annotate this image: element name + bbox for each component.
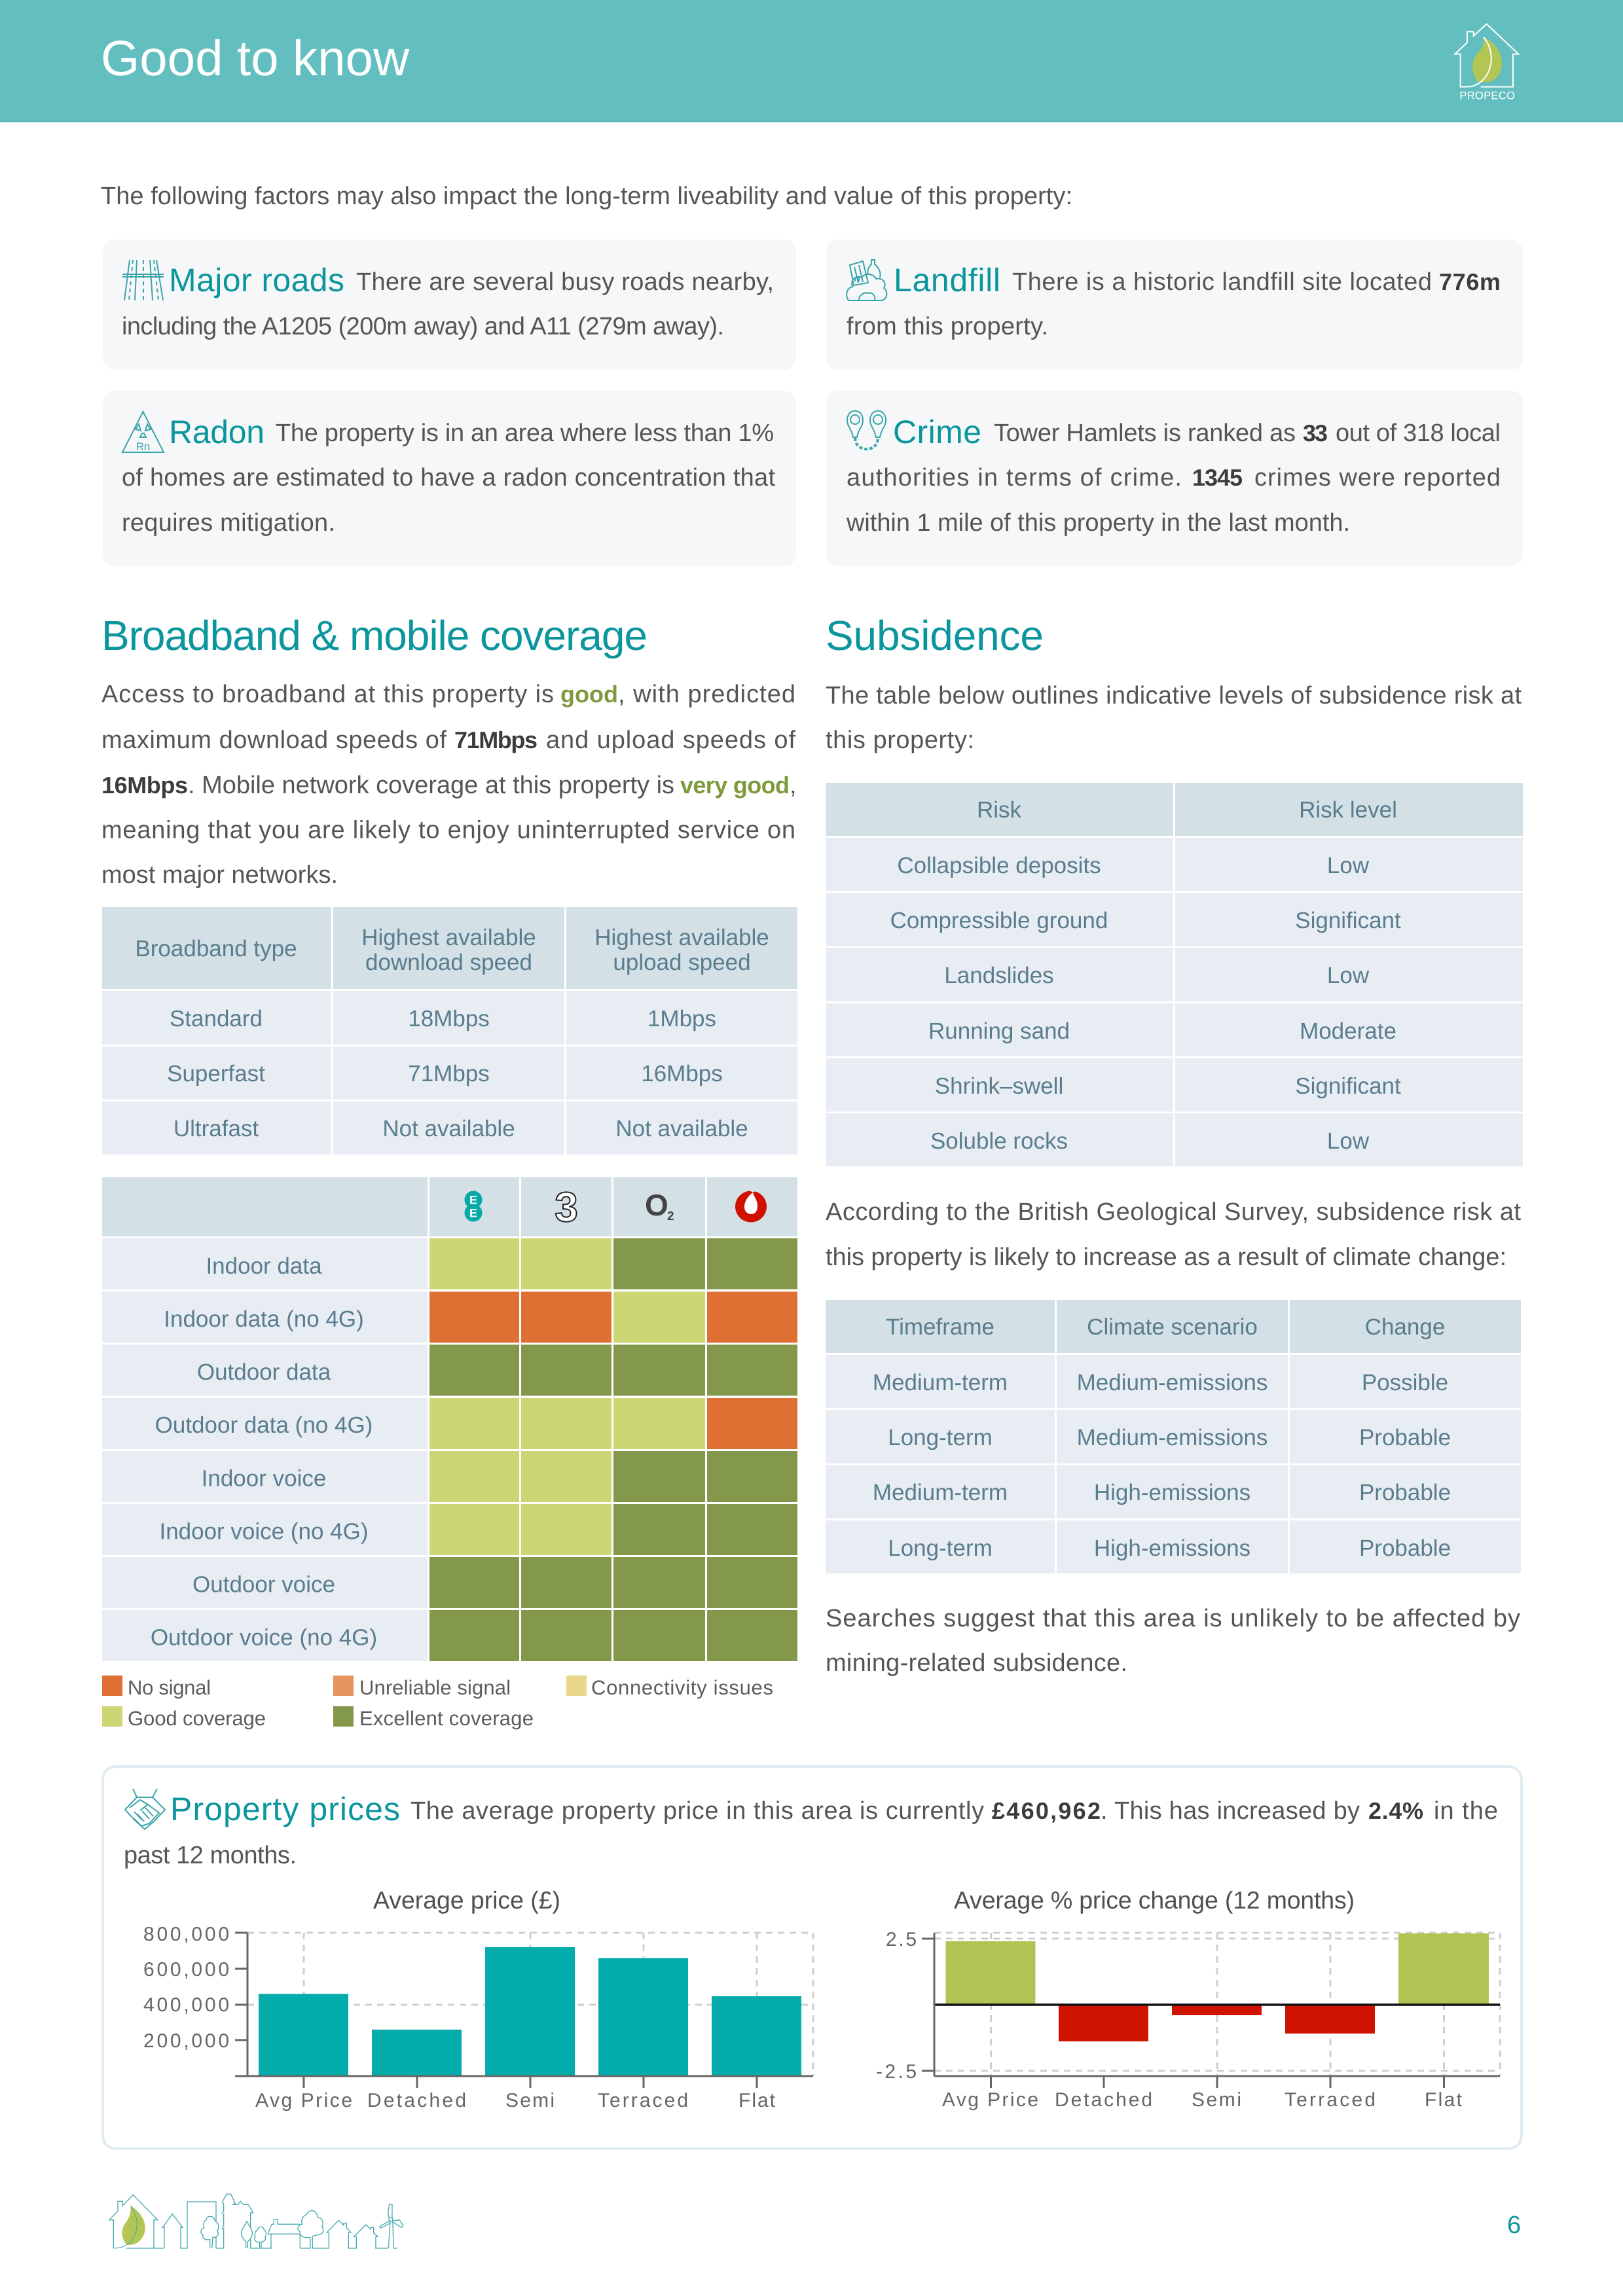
text: subsidence intro: [826, 682, 1522, 754]
text: radon: The property is in an area where less than 1%: [276, 420, 774, 447]
text: crime: 33: [1303, 420, 1328, 446]
table: broadband speeds: Highest available: [361, 925, 536, 950]
text: crime: [846, 420, 1501, 537]
legend: mobile coverage: Connectivity issues: [591, 1676, 773, 1699]
x axis labels: average price: Terraced: [598, 2090, 688, 2111]
y axis labels: price change: -2.5: [876, 2061, 917, 2083]
table: mobile coverage: Indoor voice: [202, 1466, 326, 1491]
table: climate scenarios: Climate scenario: [1087, 1314, 1258, 1340]
panel: crime: [826, 391, 1523, 566]
panel: major roads: [103, 240, 796, 370]
intro text: The following factors may also impact the long-term liveability and value of this property:: [101, 183, 1072, 210]
table: mobile coverage: Outdoor voice (no 4G): [151, 1624, 377, 1651]
table: climate scenarios: High-emissions: [1094, 1535, 1250, 1561]
heading: crime: Crime: [893, 414, 981, 450]
title: Good to know: [101, 31, 410, 86]
icon: Propeco logo: PROPECO: [1459, 89, 1515, 101]
table: subsidence risk: Significant: [1295, 908, 1401, 933]
x axis labels: price change: Detached: [1055, 2089, 1152, 2111]
text: broadband summary: Access to broadband at this property is: [101, 681, 554, 708]
text: major roads: There are several busy roads nearby,: [356, 268, 774, 296]
text: property prices summary: 2.4%: [1368, 1797, 1423, 1824]
table: subsidence risk: Low: [1327, 963, 1370, 988]
text: property prices summary: £460,962: [992, 1797, 1101, 1824]
table: broadband speeds: 1Mbps: [647, 1006, 716, 1031]
table: subsidence risk: Collapsible deposits: [897, 853, 1101, 878]
legend: mobile coverage: Excellent coverage: [359, 1707, 534, 1730]
text: broadband summary: 16Mbps: [101, 772, 188, 798]
text: radon: of homes are estimated to have a radon concentration that: [122, 464, 775, 492]
table: broadband speeds: Standard: [170, 1006, 263, 1031]
text: broadband summary: most major networks.: [101, 861, 338, 889]
text: radon: [122, 420, 775, 537]
icon: O2 logo: O: [645, 1188, 668, 1222]
icon: motorway: [122, 260, 164, 300]
table: subsidence risk: Shrink–swell: [935, 1073, 1063, 1099]
legend: mobile coverage: [102, 1676, 773, 1730]
text: broadband summary: ,: [790, 772, 797, 799]
footer skyline illustration: [109, 2194, 403, 2248]
table: broadband speeds: Ultrafast: [173, 1116, 259, 1141]
text: broadband summary: good: [560, 681, 618, 708]
text: mining subsidence: mining-related subsidence.: [826, 1649, 1127, 1677]
icon: EE logo: [465, 1191, 482, 1221]
panel: property prices: [103, 1767, 1522, 2149]
text: climate change intro: [826, 1198, 1521, 1271]
icon: radon: [122, 412, 164, 453]
table: mobile coverage: Indoor data (no 4G): [164, 1306, 364, 1332]
icon: handshake: [125, 1789, 165, 1829]
table: climate scenarios: High-emissions: [1094, 1480, 1250, 1505]
table: climate scenarios: Probable: [1359, 1535, 1451, 1561]
table: subsidence risk: Moderate: [1300, 1018, 1396, 1044]
text: broadband summary: , with predicted: [618, 681, 795, 708]
heading: radon: Radon: [169, 414, 264, 450]
table: climate scenarios: Medium-term: [873, 1480, 1008, 1505]
table: broadband speeds: 16Mbps: [641, 1061, 723, 1086]
chart title: average price: Average price (£): [373, 1886, 560, 1914]
text: property prices summary: . This has increased by: [1101, 1797, 1360, 1825]
table: mobile coverage: Outdoor data (no 4G): [155, 1412, 373, 1438]
table: climate scenarios: Long-term: [888, 1425, 993, 1450]
y axis labels: average price: 400,000: [143, 1994, 229, 2016]
table: climate scenarios: Probable: [1359, 1480, 1451, 1505]
table: subsidence risk: Landslides: [944, 963, 1054, 988]
text: climate change intro: According to the British Geological Survey, subsidence risk at: [826, 1198, 1521, 1226]
table: climate scenarios: Medium-emissions: [1077, 1370, 1267, 1395]
x axis labels: average price: [255, 2090, 776, 2111]
text: mining subsidence: Searches suggest that this area is unlikely to be affected by: [826, 1605, 1520, 1632]
y axis labels: average price: [143, 1924, 229, 2052]
table: broadband speeds: 71Mbps: [408, 1061, 490, 1086]
text: major roads: including the A1205 (200m away) and A11 (279m away).: [122, 313, 724, 340]
text: crime: within 1 mile of this property in the last month.: [846, 509, 1350, 537]
chart: average price: [143, 1886, 813, 2111]
table: broadband speeds: download speed: [365, 950, 532, 975]
heading: major roads: Major roads: [169, 262, 344, 298]
icon: landfill: [847, 260, 886, 300]
y axis labels: price change: 2.5: [886, 1929, 917, 1950]
text: broadband summary: and upload speeds of: [546, 726, 795, 754]
icon: Propeco logo: [1455, 24, 1518, 101]
panel: landfill: [826, 240, 1523, 370]
x axis labels: average price: Semi: [505, 2090, 555, 2111]
chart: average percent price change: [876, 1886, 1500, 2111]
text: property prices summary: [124, 1797, 1498, 1869]
heading: subsidence: Subsidence: [826, 612, 1044, 659]
table: subsidence risk: Risk level: [1299, 797, 1397, 823]
table: climate scenarios: [826, 1300, 1521, 1573]
table: climate scenarios: Probable: [1359, 1425, 1451, 1450]
table: climate scenarios: Possible: [1362, 1370, 1448, 1395]
icon: O2 logo: 2: [667, 1210, 674, 1223]
x axis labels: price change: Semi: [1192, 2089, 1241, 2111]
text: major roads: [122, 268, 774, 340]
bars: price change: [945, 1933, 1489, 2041]
table: climate scenarios: Medium-term: [873, 1370, 1008, 1395]
text: broadband summary: [101, 681, 797, 889]
text: crime: Tower Hamlets is ranked as: [994, 420, 1296, 447]
table: subsidence risk: Compressible ground: [890, 908, 1108, 933]
text: mining subsidence: [826, 1605, 1520, 1677]
icon: Three logo: 3: [555, 1183, 578, 1230]
table: climate scenarios: Medium-emissions: [1077, 1425, 1267, 1450]
table: mobile coverage: Indoor data: [206, 1253, 322, 1279]
text: radon: requires mitigation.: [122, 509, 335, 537]
text: crime: out of 318 local: [1336, 420, 1501, 447]
bars: average price: [259, 1947, 801, 2076]
table: subsidence risk: Significant: [1295, 1073, 1401, 1099]
table: mobile coverage: Outdoor data: [197, 1359, 331, 1385]
icon: handcuffs: [847, 411, 886, 449]
legend: mobile coverage: No signal: [128, 1676, 211, 1699]
text: climate change intro: this property is likely to increase as a result of climate change:: [826, 1244, 1506, 1271]
table: broadband speeds: upload speed: [613, 950, 751, 975]
x axis labels: price change: Terraced: [1285, 2089, 1376, 2111]
table: subsidence risk: Running sand: [928, 1018, 1070, 1044]
y axis labels: average price: 800,000: [143, 1924, 229, 1945]
text: broadband summary: maximum download speeds of: [101, 726, 447, 754]
table: broadband speeds: Highest available: [594, 925, 769, 950]
table: broadband speeds: Superfast: [167, 1061, 265, 1086]
table: mobile coverage: [102, 1177, 797, 1661]
header banner: [0, 0, 1623, 122]
legend: mobile coverage: Unreliable signal: [359, 1676, 511, 1699]
heading: broadband and mobile coverage: Broadband & mobile coverage: [101, 612, 647, 659]
text: broadband summary: . Mobile network coverage at this property is: [188, 772, 674, 799]
x axis labels: average price: Detached: [367, 2090, 466, 2111]
text: landfill: from this property.: [847, 313, 1048, 340]
table: subsidence risk: Risk: [977, 797, 1022, 823]
heading: property prices: Property prices: [170, 1791, 400, 1827]
table: broadband speeds: Not available: [615, 1116, 748, 1141]
table: mobile coverage: Outdoor voice: [192, 1572, 335, 1597]
text: property prices summary: The average property price in this area is currently: [410, 1797, 984, 1825]
x axis labels: price change: [942, 2089, 1463, 2111]
text: crime: 1345: [1192, 464, 1243, 491]
text: subsidence intro: this property:: [826, 726, 974, 754]
x axis labels: price change: Avg Price: [942, 2089, 1038, 2111]
table: broadband speeds: 18Mbps: [408, 1006, 490, 1031]
x axis labels: average price: Flat: [739, 2090, 776, 2111]
text: landfill: [847, 268, 1501, 340]
text: landfill: There is a historic landfill site located: [1012, 268, 1432, 296]
text: property prices summary: in the: [1434, 1797, 1498, 1825]
chart title: price change: Average % price change (12 months): [954, 1886, 1355, 1914]
icon: EE logo: E: [469, 1207, 477, 1220]
text: subsidence intro: The table below outlines indicative levels of subsidence risk at: [826, 682, 1522, 709]
table: subsidence risk: Soluble rocks: [930, 1128, 1068, 1154]
legend: mobile coverage: Good coverage: [128, 1707, 266, 1730]
table: climate scenarios: Long-term: [888, 1535, 993, 1561]
text: broadband summary: very good: [680, 772, 790, 798]
table: mobile coverage: Indoor voice (no 4G): [159, 1518, 369, 1545]
table: climate scenarios: Timeframe: [886, 1314, 994, 1340]
icon: EE logo: E: [469, 1194, 477, 1207]
y axis labels: price change: [876, 1929, 917, 2083]
x axis labels: price change: Flat: [1425, 2089, 1463, 2111]
heading: landfill: Landfill: [894, 262, 1000, 298]
table: subsidence risk: Low: [1327, 853, 1370, 878]
text: landfill: 776m: [1439, 268, 1501, 295]
table: subsidence risk: Low: [1327, 1128, 1370, 1154]
table: broadband speeds: Not available: [382, 1116, 515, 1141]
table: broadband speeds: [102, 907, 797, 1155]
y axis labels: average price: 200,000: [143, 2030, 229, 2052]
icon: radon: Rn: [136, 440, 150, 453]
y axis labels: average price: 600,000: [143, 1959, 229, 1981]
table: climate scenarios: Change: [1365, 1314, 1445, 1340]
x axis labels: average price: Avg Price: [255, 2090, 352, 2111]
text: crime: crimes were reported: [1254, 464, 1501, 492]
icon: Vodafone logo: [735, 1189, 767, 1223]
panel: radon: [103, 391, 796, 566]
table: subsidence risk: [826, 783, 1523, 1166]
text: broadband summary: meaning that you are likely to enjoy uninterrupted service on: [101, 817, 795, 844]
page number: 6: [1507, 2212, 1521, 2239]
text: property prices summary: past 12 months.: [124, 1842, 297, 1869]
text: crime: authorities in terms of crime.: [847, 464, 1182, 492]
table: broadband speeds: Broadband type: [135, 936, 297, 961]
text: broadband summary: 71Mbps: [454, 726, 538, 753]
